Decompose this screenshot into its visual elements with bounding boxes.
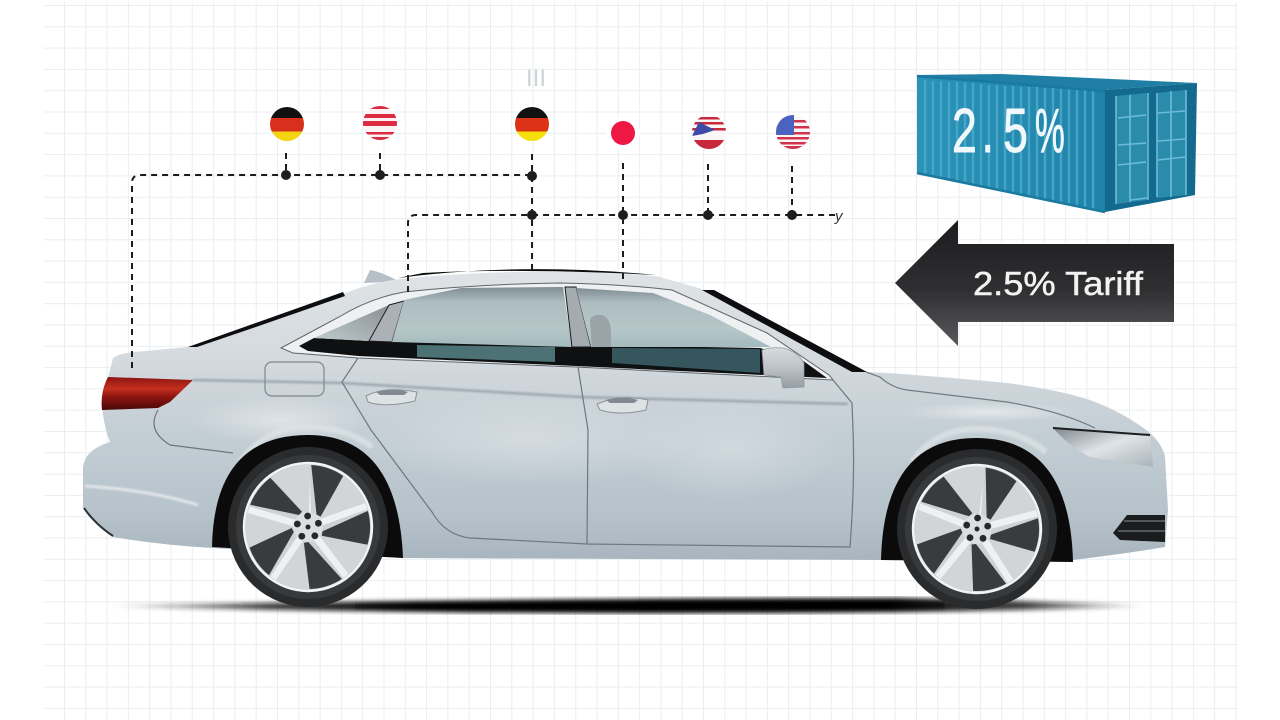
rear pillar: [369, 301, 404, 342]
shark fin antenna: [364, 270, 398, 283]
front wheel: [888, 445, 1061, 618]
flag: USA centre-right: [692, 115, 726, 149]
flag: Japan: [606, 116, 640, 150]
flag: Germany left: [270, 107, 304, 142]
container top: [917, 74, 1197, 90]
fuel door: [265, 362, 324, 396]
container label: %: [1035, 96, 1065, 166]
body highlights: [360, 395, 700, 485]
car: [83, 269, 1168, 618]
shipping container: [917, 74, 1197, 212]
rear lower edge: [84, 508, 113, 536]
rear window stripe: [188, 292, 345, 347]
car body: [83, 272, 1168, 560]
tariff arrow: [895, 220, 1174, 346]
front door handle: [597, 398, 648, 413]
headlight: [1053, 428, 1153, 467]
flag: USA right: [776, 115, 810, 149]
connector diagram: [132, 153, 844, 368]
hood line: [866, 372, 1095, 428]
faint mark above flags: III: [526, 65, 546, 92]
flag: Germany centre: [515, 107, 549, 142]
rear quarter glass: [314, 305, 389, 341]
container label: 2.5: [952, 97, 1028, 166]
container long side: [917, 75, 1105, 212]
window frame: [281, 283, 833, 380]
windshield stripe: [702, 290, 867, 372]
container label: [952, 96, 1065, 166]
front wheel arch: [881, 438, 1073, 562]
flag: striped left: [363, 106, 397, 140]
front grille: [1113, 515, 1165, 542]
fender lips: [240, 427, 1046, 462]
window dark band: [299, 338, 827, 378]
roof trim: [398, 269, 656, 278]
ground shadow: [100, 598, 1150, 613]
door seams: [154, 358, 854, 547]
container end doors: [1105, 83, 1197, 212]
rear door handle: [366, 390, 417, 405]
side mirror: [762, 348, 804, 388]
body crease: [193, 380, 848, 404]
front door glass: [576, 288, 771, 347]
bumper light crease: [85, 486, 198, 505]
tail light: [102, 377, 193, 410]
front door lower tint: [612, 348, 760, 373]
rear wheel: [220, 444, 391, 615]
rear door glass: [392, 287, 572, 347]
rear wheel arch: [212, 435, 403, 558]
arrow label: 2.5% Tariff: [973, 265, 1144, 302]
rear door lower tint: [417, 345, 555, 362]
headrest: [590, 315, 611, 347]
centre pillar: [565, 287, 591, 347]
axis end label: y: [834, 208, 844, 225]
